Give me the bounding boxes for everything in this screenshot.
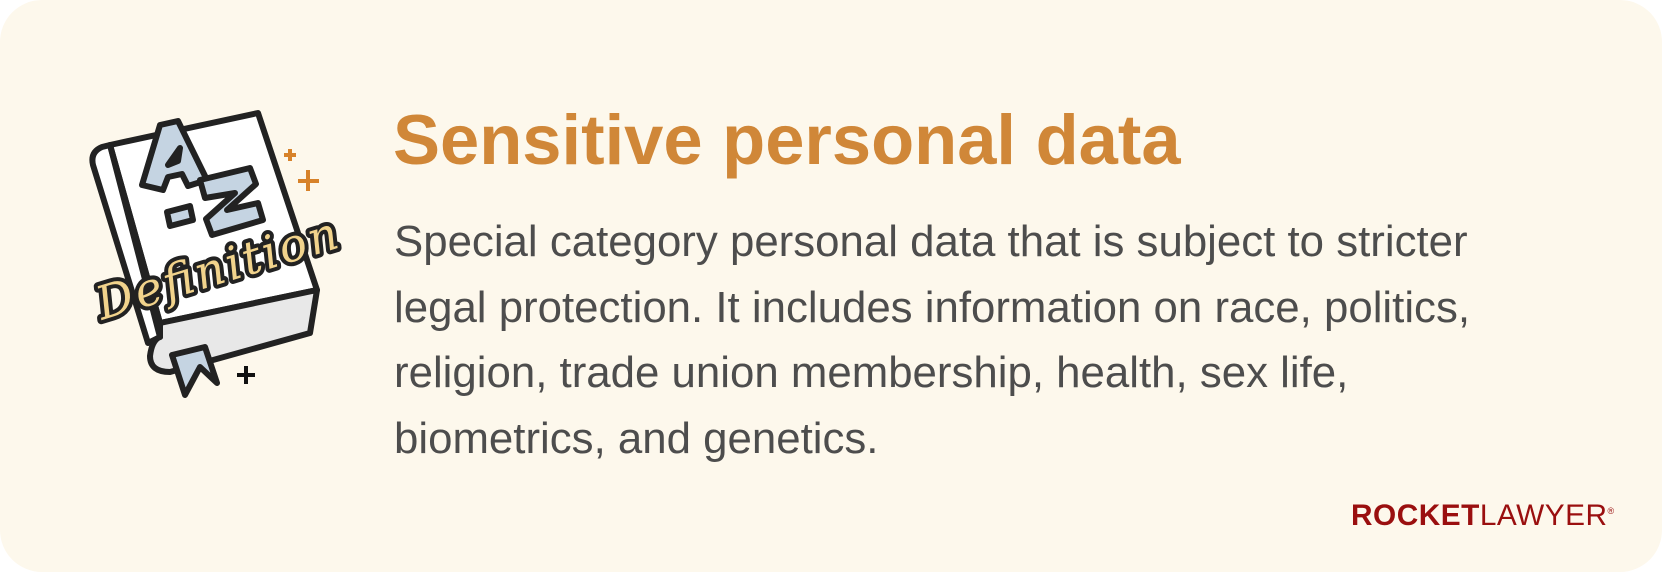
body text xyxy=(394,217,1470,462)
title: Sensitive personal data xyxy=(393,100,1181,179)
definition script: Definition xyxy=(88,206,344,331)
logo: Rocket Lawyer: ROCKETLAWYER® xyxy=(1351,499,1615,532)
body text: Special category personal data that is subject to stricter xyxy=(394,217,1468,266)
body text: legal protection. It includes information on race, politics, xyxy=(394,282,1470,332)
body text: biometrics, and genetics. xyxy=(394,414,878,462)
sparkles xyxy=(284,149,319,191)
body text: religion, trade union membership, health, sex life, xyxy=(394,348,1348,397)
icon: definition book xyxy=(88,110,344,398)
